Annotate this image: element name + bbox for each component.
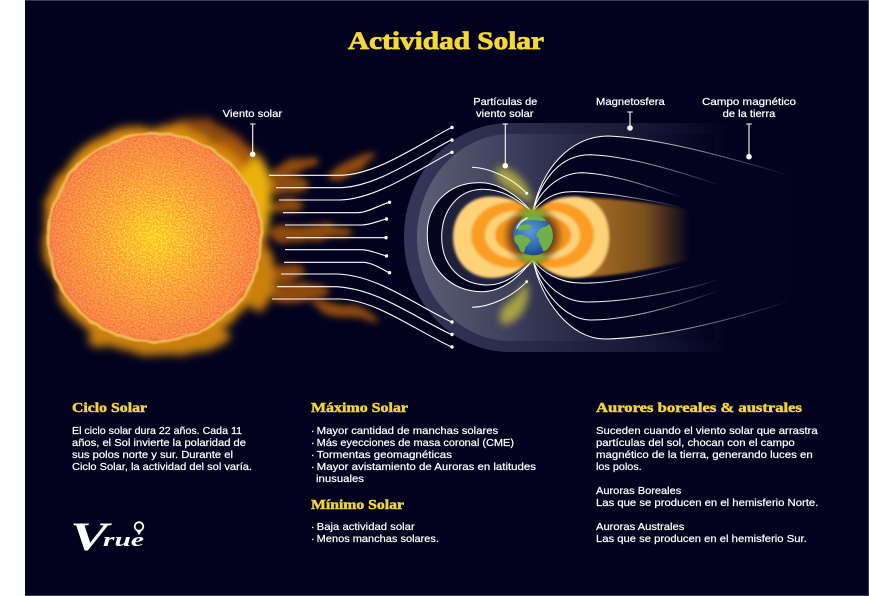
list: máximo solar: ·	[311, 426, 314, 437]
body: ciclo solar: sus polos norte y sur. Durante el	[72, 450, 233, 461]
text block: ciclo solar	[72, 401, 252, 473]
list: máximo solar: ·	[311, 450, 314, 461]
magnetosphere	[404, 123, 790, 352]
right belt	[535, 194, 611, 280]
body: auroras: Las que se producen en el hemisferio Sur.	[596, 534, 807, 545]
label: partículas de viento solar: Partículas de	[473, 97, 538, 108]
left belt	[451, 194, 531, 280]
sun corona glow	[42, 112, 276, 354]
logo: rue	[103, 530, 145, 551]
body: ciclo solar: años, el Sol invierte la polaridad de	[72, 438, 246, 449]
label: magnetosfera: Magnetosfera	[596, 97, 665, 108]
body: ciclo solar	[72, 426, 252, 473]
aurora glow	[496, 166, 533, 325]
sun disc	[47, 132, 263, 343]
list: máximo solar	[311, 426, 536, 485]
illustration: sun with corona and flares	[42, 112, 380, 354]
text block: auroras	[596, 401, 818, 545]
list: máximo solar: Más eyecciones de masa coronal (CME)	[317, 438, 514, 449]
heading: ciclo solar: Ciclo Solar	[72, 401, 147, 416]
magnetosphere outer shell	[404, 123, 730, 352]
body: auroras: los polos.	[596, 462, 642, 473]
earth shadow	[502, 204, 564, 266]
label: campo magnético de la tierra: de la tierra	[723, 109, 776, 120]
label: magnetosfera	[596, 97, 665, 131]
label: viento solar	[223, 109, 283, 157]
list: mínimo solar: Menos manchas solares.	[317, 534, 439, 545]
list: mínimo solar: ·	[311, 522, 314, 533]
list: máximo solar: Mayor cantidad de manchas solares	[317, 426, 498, 437]
label: campo magnético de la tierra	[702, 97, 796, 160]
body: ciclo solar: El ciclo solar dura 22 años. Cada 11	[72, 426, 242, 437]
label: viento solar: Viento solar	[223, 109, 283, 120]
list: máximo solar: ·	[311, 462, 314, 473]
list: mínimo solar: Baja actividad solar	[317, 522, 415, 533]
heading: máximo solar: Máximo Solar	[311, 401, 408, 416]
magnetic field lines	[427, 136, 787, 339]
heading: auroras: Aurores boreales & australes	[596, 401, 803, 416]
list: máximo solar: ·	[311, 438, 314, 449]
body: auroras: Suceden cuando el viento solar que arrastra	[596, 426, 818, 437]
list: máximo solar: Mayor avistamiento de Auroras en latitudes	[317, 462, 536, 473]
list: máximo solar: Tormentas geomagnéticas	[317, 450, 452, 461]
radiation belts	[451, 194, 687, 280]
dark field region left	[427, 183, 533, 292]
body: auroras	[596, 426, 818, 545]
list: mínimo solar: ·	[311, 534, 314, 545]
body: auroras: magnético de la tierra, generando luces en	[596, 450, 813, 461]
dark field region right	[533, 136, 790, 339]
magnetotail glow	[570, 197, 690, 278]
solar wind arrows	[269, 126, 454, 349]
icon: balloon	[135, 522, 143, 535]
label: partículas de viento solar: viento solar	[476, 109, 534, 120]
body: auroras: Auroras Boreales	[596, 486, 681, 497]
particle arrows	[472, 167, 528, 307]
list: mínimo solar	[311, 522, 439, 545]
title: Actividad Solar	[348, 28, 544, 55]
body: auroras: Las que se producen en el hemisferio Norte.	[596, 498, 818, 509]
logo	[70, 514, 145, 559]
body: auroras: partículas del sol, chocan con el campo	[596, 438, 795, 449]
text block: máximo solar	[311, 401, 536, 485]
body: auroras: Auroras Australes	[596, 522, 684, 533]
text block: mínimo solar	[311, 498, 439, 545]
icon: earth	[513, 208, 553, 263]
label: campo magnético de la tierra: Campo magnético	[702, 97, 796, 108]
magnetosphere inner shell	[417, 134, 715, 341]
solar flares	[258, 150, 380, 327]
logo: V	[70, 514, 113, 559]
body: ciclo solar: Ciclo Solar, la actividad del sol varía.	[72, 462, 252, 473]
label: partículas de viento solar	[473, 97, 538, 168]
list: máximo solar: inusuales	[316, 474, 364, 485]
heading: mínimo solar: Mínimo Solar	[311, 498, 404, 513]
